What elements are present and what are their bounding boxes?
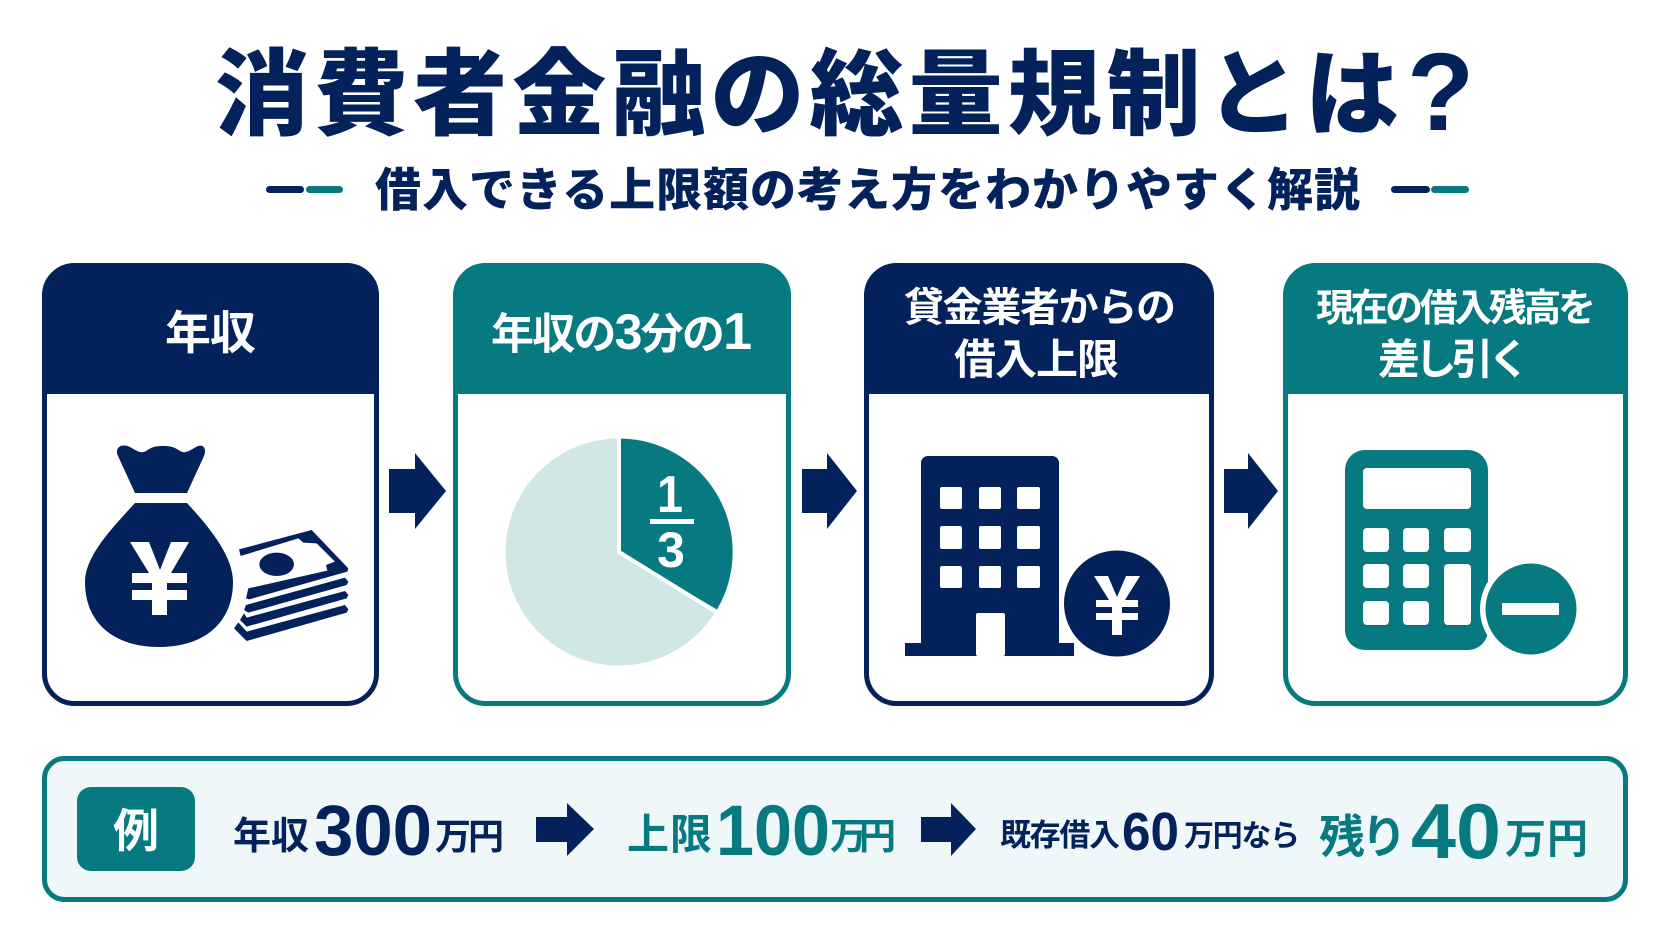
text: remaining 400 thousand yen: 40 [1411, 787, 1501, 875]
text: remaining 400 thousand yen [1319, 787, 1588, 875]
text: existing borrowing 600 thousand yen [1000, 802, 1300, 862]
text: existing borrowing 600 thousand yen: 既存借入 [1000, 818, 1120, 853]
panel header: annual income: 年収 [165, 307, 256, 359]
panel header: subtract current balance [1283, 263, 1628, 394]
panel: lender borrowing limit [864, 263, 1214, 704]
panel header: subtract current balance: 現在の借入残高を [1316, 288, 1596, 330]
arrow 1 [389, 453, 446, 529]
text: existing borrowing 600 thousand yen: 万円なら [1184, 820, 1300, 853]
panel header: lender borrowing limit: 借入上限 [954, 336, 1119, 383]
text: limit 1 million yen: 100 [716, 792, 830, 871]
text: annual income 3 million yen [233, 792, 504, 871]
arrow: example step 1 [536, 803, 594, 856]
pie fraction label [650, 466, 694, 578]
arrow 2 [802, 453, 857, 529]
text: existing borrowing 600 thousand yen: 60 [1122, 802, 1179, 862]
pie fraction label: 3 [657, 522, 685, 578]
panel: one third of income [453, 263, 791, 704]
panel header: one third of income [453, 263, 791, 394]
pie fraction label: 1 [657, 466, 683, 524]
panel header: lender borrowing limit [864, 263, 1214, 394]
icon: calculator with minus [1345, 450, 1582, 660]
text: remaining 400 thousand yen: 残り [1319, 811, 1407, 863]
text: limit 1 million yen [627, 792, 896, 871]
panel: subtract current balance [1283, 263, 1628, 704]
subtitle: 借入できる上限額の考え方をわかりやすく解説 [375, 154, 1360, 220]
right subtitle accent [1391, 186, 1469, 193]
left subtitle accent [266, 186, 343, 193]
text: annual income 3 million yen: 万円 [435, 816, 504, 857]
panel header: one third of income: 年収の3分の1 [491, 303, 752, 361]
panel: annual income [42, 263, 379, 704]
arrow 3 [1224, 453, 1278, 529]
panel header: subtract current balance: 差し引く [1378, 336, 1530, 383]
chart: pie one third [506, 436, 733, 666]
text: annual income 3 million yen: 年収 [233, 816, 309, 858]
arrow: example step 2 [921, 803, 976, 856]
panel header: annual income [42, 263, 379, 394]
badge: example: 例 [113, 805, 159, 857]
panel header: lender borrowing limit: 貸金業者からの [904, 286, 1176, 330]
title: ? [1407, 31, 1474, 154]
text: remaining 400 thousand yen: 万円 [1505, 816, 1588, 862]
text: annual income 3 million yen: 300 [314, 792, 432, 871]
text: limit 1 million yen: 万円 [830, 816, 896, 857]
badge: example [77, 787, 195, 871]
icon: bank building with yen coin [905, 456, 1175, 661]
icon: money bag with yen [85, 445, 233, 647]
title: 消費者金融の総量規制とは [215, 19, 1399, 155]
icon: stack of banknotes [234, 530, 348, 641]
panel: example [44, 758, 1626, 900]
text: limit 1 million yen: 上限 [627, 811, 712, 858]
